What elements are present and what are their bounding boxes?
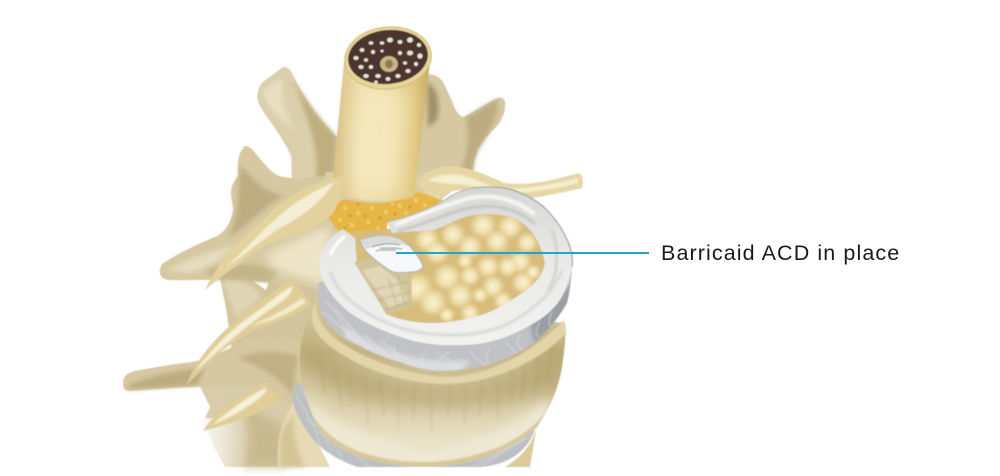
leader line [396,252,649,254]
device titanium cap [360,236,423,273]
device mesh body [354,258,412,315]
bone: upper right spinous process [410,74,505,180]
bone: lumbar connecting mass [220,272,330,365]
Barricaid ACD device [354,236,423,315]
cord cut end [341,23,435,93]
upper disc side wall (annulus fibres) [318,268,572,372]
vertebra below: edge [278,400,537,467]
upper left nerve root [205,174,347,290]
bone: middle left transverse process [160,146,345,290]
right nerve root [417,166,583,201]
upper endplate rim [312,300,566,384]
bone: lower left transverse process [123,337,310,405]
spinal cord tube [333,23,435,201]
vertebral body [300,303,568,475]
middle nerve root [187,279,311,384]
fat layer [328,192,441,237]
nucleus pulposus [350,212,545,325]
annulus ring: top surface [319,187,572,345]
backing tissue behind cord base [325,172,445,222]
lower intervertebral disc [293,383,535,467]
bone: upper left process [257,67,337,180]
anatomical illustration: spine with Barricaid ACD [123,26,898,474]
bone: lowest lumbar mass [197,380,300,470]
lower nerve root [203,382,281,431]
label: Barricaid ACD in place [661,241,900,265]
